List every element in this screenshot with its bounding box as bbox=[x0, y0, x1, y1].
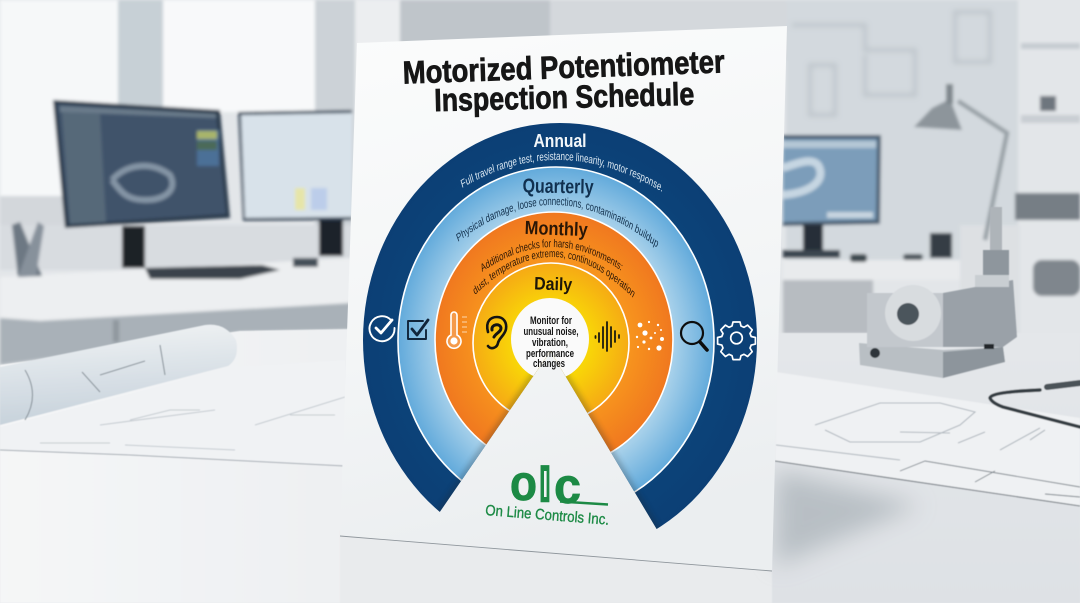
rolled blueprint bbox=[0, 325, 237, 425]
desk lamp bbox=[914, 84, 1007, 240]
logo mark: o bbox=[510, 455, 537, 511]
daily heading: Daily bbox=[534, 273, 573, 295]
table surface bbox=[0, 207, 1080, 603]
monthly text: dust, temperature extremes, continuous operation bbox=[474, 250, 634, 298]
daily text: unusual noise, bbox=[524, 326, 578, 338]
centre circle bbox=[511, 298, 589, 380]
daily text: Monitor for bbox=[530, 315, 573, 327]
ring: annual bbox=[363, 123, 757, 557]
icon: gear bbox=[718, 322, 755, 360]
logo underline bbox=[560, 502, 608, 504]
logo mark: c bbox=[554, 458, 581, 514]
logo mark: l bbox=[537, 457, 553, 513]
ring: quarterly bbox=[398, 167, 714, 515]
table shadow by poster bbox=[775, 470, 920, 566]
shadow along cut edge bbox=[437, 351, 660, 529]
quarterly text: Physical damage, loose connections, contamination buildup bbox=[456, 198, 658, 248]
rear right monitor bbox=[783, 135, 923, 262]
title: Motorized Potentiometer bbox=[402, 43, 725, 91]
icon: magnifier bbox=[681, 322, 707, 350]
ring: daily bbox=[473, 263, 629, 423]
daily text: performance bbox=[526, 348, 574, 360]
icon: ear bbox=[487, 317, 506, 348]
logo mark bbox=[510, 455, 581, 514]
black cable bbox=[990, 383, 1080, 427]
annual heading: Annual bbox=[534, 131, 586, 151]
monthly heading: Monthly bbox=[524, 218, 588, 241]
icon: check circle bbox=[370, 316, 395, 341]
pencil cup bbox=[12, 222, 44, 277]
company name: On Line Controls Inc. bbox=[485, 502, 610, 529]
right plans on table bbox=[775, 372, 1080, 506]
title: Inspection Schedule bbox=[434, 76, 695, 118]
icon: particles bbox=[636, 321, 664, 351]
daily text bbox=[524, 315, 578, 370]
annual text: Full travel range test, resistance linearity, motor response. bbox=[460, 152, 662, 192]
ring: monthly bbox=[435, 212, 673, 468]
precision device bbox=[859, 207, 1017, 378]
logo: On Line Controls bbox=[485, 455, 610, 529]
icon: thermometer bbox=[447, 312, 467, 348]
icon: checkbox bbox=[408, 320, 428, 339]
wall sketches bbox=[792, 12, 990, 115]
icon: sound wave bbox=[596, 322, 619, 351]
concentric schedule rings bbox=[363, 123, 757, 529]
title bbox=[402, 43, 725, 118]
pen holder on desk bbox=[930, 233, 952, 258]
quarterly heading: Quarterly bbox=[522, 175, 594, 199]
left plans on table bbox=[0, 360, 345, 466]
left monitor bbox=[53, 100, 280, 279]
monthly text: Additional checks for harsh environments: bbox=[482, 239, 622, 272]
poster sheet bbox=[340, 26, 787, 571]
daily text: vibration, bbox=[532, 337, 568, 349]
daily text: changes bbox=[533, 358, 565, 370]
right monitor bbox=[238, 110, 352, 267]
